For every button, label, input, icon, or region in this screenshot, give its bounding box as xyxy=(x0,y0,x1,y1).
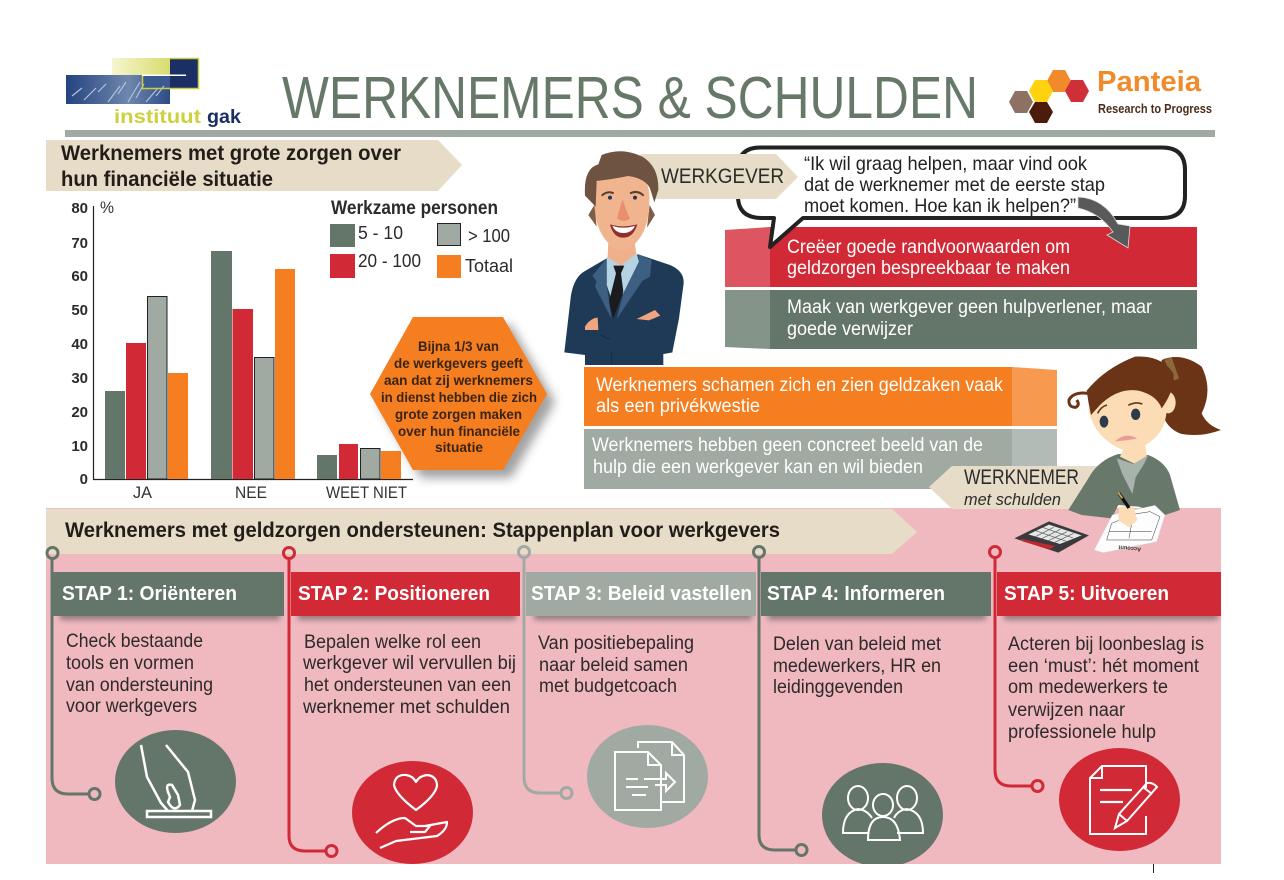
step 3: Beleid vastellen xyxy=(526,572,756,697)
category labels: JA xyxy=(133,484,152,502)
panel: red bar randvoorwaarden: geldzorgen bespreekbaar te maken xyxy=(787,258,1070,279)
illustration: calculator xyxy=(1014,521,1089,553)
text block: step 3: Van positiebepaling xyxy=(538,633,694,654)
panel: grey bar concreet beeld xyxy=(584,429,1057,489)
text block: step 5: professionele hulp xyxy=(1008,722,1156,743)
logo: instituut gak: instituut xyxy=(114,107,202,128)
callout: hexagon: over hun financiële xyxy=(398,423,520,439)
heading: stappenplan xyxy=(46,509,917,554)
callout: hexagon xyxy=(370,317,555,478)
text block: step 2: werkgever wil vervullen bij xyxy=(302,653,516,674)
legend: werkzame personen: 20 - 100 xyxy=(358,251,421,271)
callout: hexagon: situatie xyxy=(435,439,483,455)
text block: step 3: naar beleid samen xyxy=(539,655,688,676)
tag: WERKNEMER met schulden xyxy=(929,466,1100,509)
text block: step 5 xyxy=(1008,634,1204,743)
tag: WERKGEVER: WERKGEVER xyxy=(661,165,784,188)
text block: step 2: Bepalen welke rol een xyxy=(304,632,481,653)
tag: WERKNEMER met schulden: WERKNEMER xyxy=(964,466,1079,489)
bars: JA xyxy=(105,296,188,479)
icon: documents with arrow xyxy=(587,725,708,828)
callout: hexagon: aan dat zij werknemers xyxy=(384,372,533,388)
panel: orange bar privékwestie xyxy=(584,367,1057,426)
callout: hexagon: Bijna 1/3 van xyxy=(418,338,499,354)
icon: document with pencil xyxy=(1059,748,1180,851)
text block: step 3: met budgetcoach xyxy=(539,676,677,697)
text block: step 2: het ondersteunen van een xyxy=(304,675,511,696)
legend: werkzame personen xyxy=(330,198,513,278)
text block: step 2 xyxy=(302,632,516,718)
illustration: paper: Account xyxy=(1118,543,1141,552)
y axis labels: 30 xyxy=(71,370,88,387)
heading: grote zorgen: Werknemers met grote zorgen over xyxy=(61,142,401,165)
bar chart xyxy=(71,198,413,502)
callout: hexagon: grote zorgen maken xyxy=(395,406,522,422)
legend: werkzame personen: Werkzame personen xyxy=(331,198,498,219)
y axis labels: 40 xyxy=(71,336,88,353)
panel: green bar verwijzer xyxy=(725,290,1197,349)
text block: step 4: medewerkers, HR en xyxy=(773,656,941,677)
panel: green bar verwijzer: Maak van werkgever geen hulpverlener, maar xyxy=(787,297,1153,318)
panel: grey bar concreet beeld: Werknemers hebben geen concreet beeld van de xyxy=(592,435,983,456)
text block: step 4: leidinggevenden xyxy=(773,677,903,698)
panel: red bar randvoorwaarden: Creëer goede randvoorwaarden om xyxy=(787,237,1070,258)
text block: step 1: tools en vormen xyxy=(66,653,194,674)
text block: step 4: Delen van beleid met xyxy=(773,634,942,655)
step 4: Informeren: STAP 4: Informeren xyxy=(767,583,945,605)
y axis labels: 80 xyxy=(71,200,88,217)
text block: step 1 xyxy=(66,631,213,717)
speech bubble: dat de werknemer met de eerste stap xyxy=(804,174,1105,196)
step 2: Positioneren xyxy=(291,572,520,718)
pink band: stappenplan background xyxy=(46,508,1221,864)
logo: instituut gak: gak xyxy=(207,107,241,128)
step 3 connector xyxy=(518,546,572,798)
illustration: paper xyxy=(1094,505,1165,553)
tag: WERKGEVER xyxy=(640,154,798,199)
text block: step 1: van ondersteuning xyxy=(66,675,213,696)
step 3: Beleid vastellen: STAP 3: Beleid vastellen xyxy=(531,583,752,605)
panel: green bar verwijzer: goede verwijzer xyxy=(787,319,914,340)
y axis labels xyxy=(71,200,88,488)
panel: grey bar concreet beeld: hulp die een werkgever kan en wil bieden xyxy=(593,457,923,478)
step 5: Uitvoeren: STAP 5: Uitvoeren xyxy=(1004,583,1169,605)
panel: red bar randvoorwaarden xyxy=(725,227,1197,287)
illustration: werkgever man xyxy=(564,151,684,365)
text block: step 5: om medewerkers te xyxy=(1008,677,1168,698)
legend: werkzame personen: Totaal xyxy=(465,256,513,276)
callout: hexagon: de werkgevers geeft xyxy=(394,355,523,371)
step 1: Oriënteren xyxy=(52,572,284,717)
heading: stappenplan: Werknemers met geldzorgen ondersteunen: Stappenplan voor werkgevers xyxy=(65,519,780,542)
text block: step 5: een ‘must’: hét moment xyxy=(1008,656,1200,677)
y axis labels: 70 xyxy=(71,235,88,252)
logo: Panteia: Panteia xyxy=(1097,66,1202,98)
panel: orange bar privékwestie: als een privékwestie xyxy=(596,396,760,417)
step 5 connector xyxy=(990,546,1043,792)
y axis labels: 60 xyxy=(71,268,88,285)
icon: group of people xyxy=(822,763,943,867)
tag: WERKNEMER met schulden: met schulden xyxy=(964,490,1061,509)
text block: step 1: Check bestaande xyxy=(66,631,203,652)
title: WERKNEMERS & SCHULDEN xyxy=(282,65,978,131)
legend: werkzame personen: > 100 xyxy=(468,226,510,246)
speech bubble: moet komen. Hoe kan ik helpen?” xyxy=(804,195,1076,217)
text block: step 5: verwijzen naar xyxy=(1008,700,1126,721)
arrow: curved grey arrow xyxy=(1078,197,1130,248)
legend: werkzame personen: 5 - 10 xyxy=(358,223,403,243)
step 2: Positioneren: STAP 2: Positioneren xyxy=(298,583,490,605)
logo: Panteia xyxy=(1009,66,1212,123)
illustration: werknemer woman xyxy=(1014,357,1221,553)
step 1 connector xyxy=(47,548,100,800)
speech bubble: “Ik wil graag helpen, maar vind ook xyxy=(804,153,1087,175)
y axis labels: 0 xyxy=(80,471,88,488)
logo: instituut gak xyxy=(66,58,241,128)
y axis labels: 50 xyxy=(71,302,88,319)
text block: step 5: Acteren bij loonbeslag is xyxy=(1008,634,1204,655)
step 2 connector xyxy=(284,548,337,856)
bar chart: % xyxy=(100,198,114,217)
step 1: Oriënteren: STAP 1: Oriënteren xyxy=(62,583,237,605)
category labels: NEE xyxy=(235,484,267,502)
text block: step 4 xyxy=(773,634,942,698)
text block: step 1: voor werkgevers xyxy=(66,696,197,717)
logo: Panteia: Research to Progress xyxy=(1098,101,1212,116)
heading: grote zorgen: hun financiële situatie xyxy=(61,168,273,191)
step 4 connector xyxy=(754,546,807,856)
category labels xyxy=(133,484,407,502)
step 5: Uitvoeren xyxy=(997,572,1221,743)
y axis labels: 10 xyxy=(71,438,88,455)
icon: heart in hand xyxy=(352,761,473,864)
speech bubble xyxy=(738,148,1185,247)
bars: NEE xyxy=(211,251,295,479)
heading: grote zorgen xyxy=(46,140,462,191)
text block: step 2: werknemer met schulden xyxy=(302,697,510,718)
callout: hexagon: in dienst hebben die zich xyxy=(381,389,537,405)
text block: step 3 xyxy=(538,633,694,697)
panel: orange bar privékwestie: Werknemers schamen zich en zien geldzaken vaak xyxy=(596,375,1003,396)
bars: WEET NIET xyxy=(317,444,401,479)
y axis labels: 20 xyxy=(71,404,88,421)
step 4: Informeren xyxy=(761,572,991,698)
icon: hand dropping coin xyxy=(115,730,236,833)
category labels: WEET NIET xyxy=(326,484,407,502)
